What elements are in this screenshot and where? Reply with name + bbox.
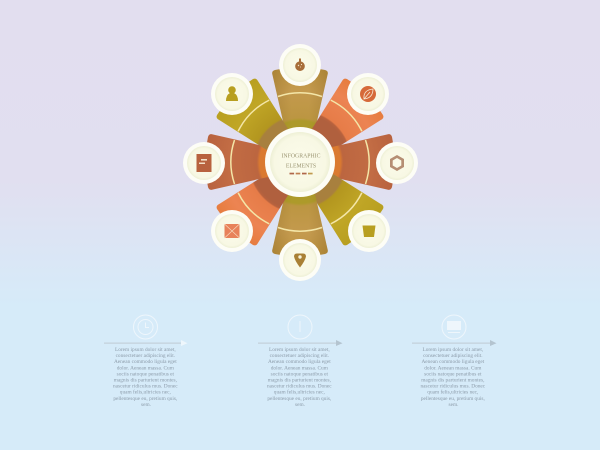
text block: dolor. Aenean massa. Cum [117, 365, 175, 371]
dashes [290, 173, 313, 174]
icon: leaf badge [347, 73, 389, 115]
panel: top petal [272, 68, 328, 130]
text block: nascetur ridiculus mus. Donec [113, 384, 178, 390]
text block: dolor. Aenean massa. Cum [271, 365, 329, 371]
arrow [412, 340, 496, 346]
icon: monitor [442, 315, 466, 339]
panel: center hub [265, 127, 335, 197]
icon: cup badge [348, 210, 390, 252]
panel: upper left petal [213, 75, 297, 159]
text block: dolor. Aenean massa. Cum [424, 365, 482, 371]
text block: pellentesque eu, pretium quis, [267, 396, 331, 402]
text block: Lorem ipsum dolor sit amet, [422, 347, 483, 353]
radial diagram [183, 44, 418, 281]
text block: quam felis,ultricies nec, [427, 389, 478, 396]
text block: sociis natoque penatibus et [117, 371, 175, 377]
text block: Aenean commodo ligula eget [114, 359, 177, 365]
panel: lower right petal [303, 165, 387, 249]
panel: upper right petal [303, 75, 387, 159]
title [282, 153, 321, 170]
panel: right petal [332, 134, 394, 190]
arrow [104, 340, 188, 346]
panel: column 2 [258, 315, 342, 408]
panel: column 3 [412, 315, 496, 408]
icon: info circle [288, 315, 312, 339]
text block: pellentesque eu, pretium quis, [113, 396, 177, 402]
title: ELEMENTS [286, 164, 316, 170]
icon: map pin badge [279, 239, 321, 281]
text block: magnis dis parturient montes, [268, 378, 331, 384]
text block: sem. [141, 402, 151, 408]
text block: sem. [295, 402, 305, 408]
text block: Lorem ipsum dolor sit amet, [115, 347, 176, 353]
text block: consectetuer adipiscing elit. [423, 353, 483, 359]
panel: lower left petal [213, 165, 297, 249]
text block: sem. [449, 402, 458, 408]
icon: person badge [211, 73, 253, 115]
arrow [258, 340, 342, 346]
text block: consectetuer adipiscing elit. [116, 353, 175, 359]
text block: quam felis,ultricies nec, [274, 389, 325, 396]
text block: pellentesque eu, pretium quis, [421, 396, 485, 402]
icon: hexagon badge [376, 142, 418, 184]
title: INFOGRAPHIC [282, 153, 321, 159]
text block: Aenean commodo ligula eget [268, 359, 331, 365]
text block: sociis natoque penatibus et [271, 371, 329, 377]
panel: column 1 [104, 315, 188, 408]
text block: magnis dis parturient montes, [114, 378, 177, 384]
text block: quam felis,ultricies nec, [120, 389, 171, 396]
text block: Lorem ipsum dolor sit amet, [269, 347, 330, 353]
text block: consectetuer adipiscing elit. [270, 353, 329, 359]
text block: Aenean commodo ligula eget [421, 359, 485, 365]
panel: left petal [206, 134, 268, 190]
icon: book badge [183, 142, 225, 184]
text block: nascetur ridiculus mus. Donec [420, 384, 486, 390]
text block: magnis dis parturient montes, [421, 378, 484, 384]
icon: envelope badge [211, 210, 253, 252]
panel: bottom petal [272, 194, 328, 256]
text block: nascetur ridiculus mus. Donec [267, 384, 332, 390]
text block: sociis natoque penatibus et [424, 371, 482, 377]
icon: flask badge [279, 44, 321, 86]
icon: clock [134, 315, 158, 339]
